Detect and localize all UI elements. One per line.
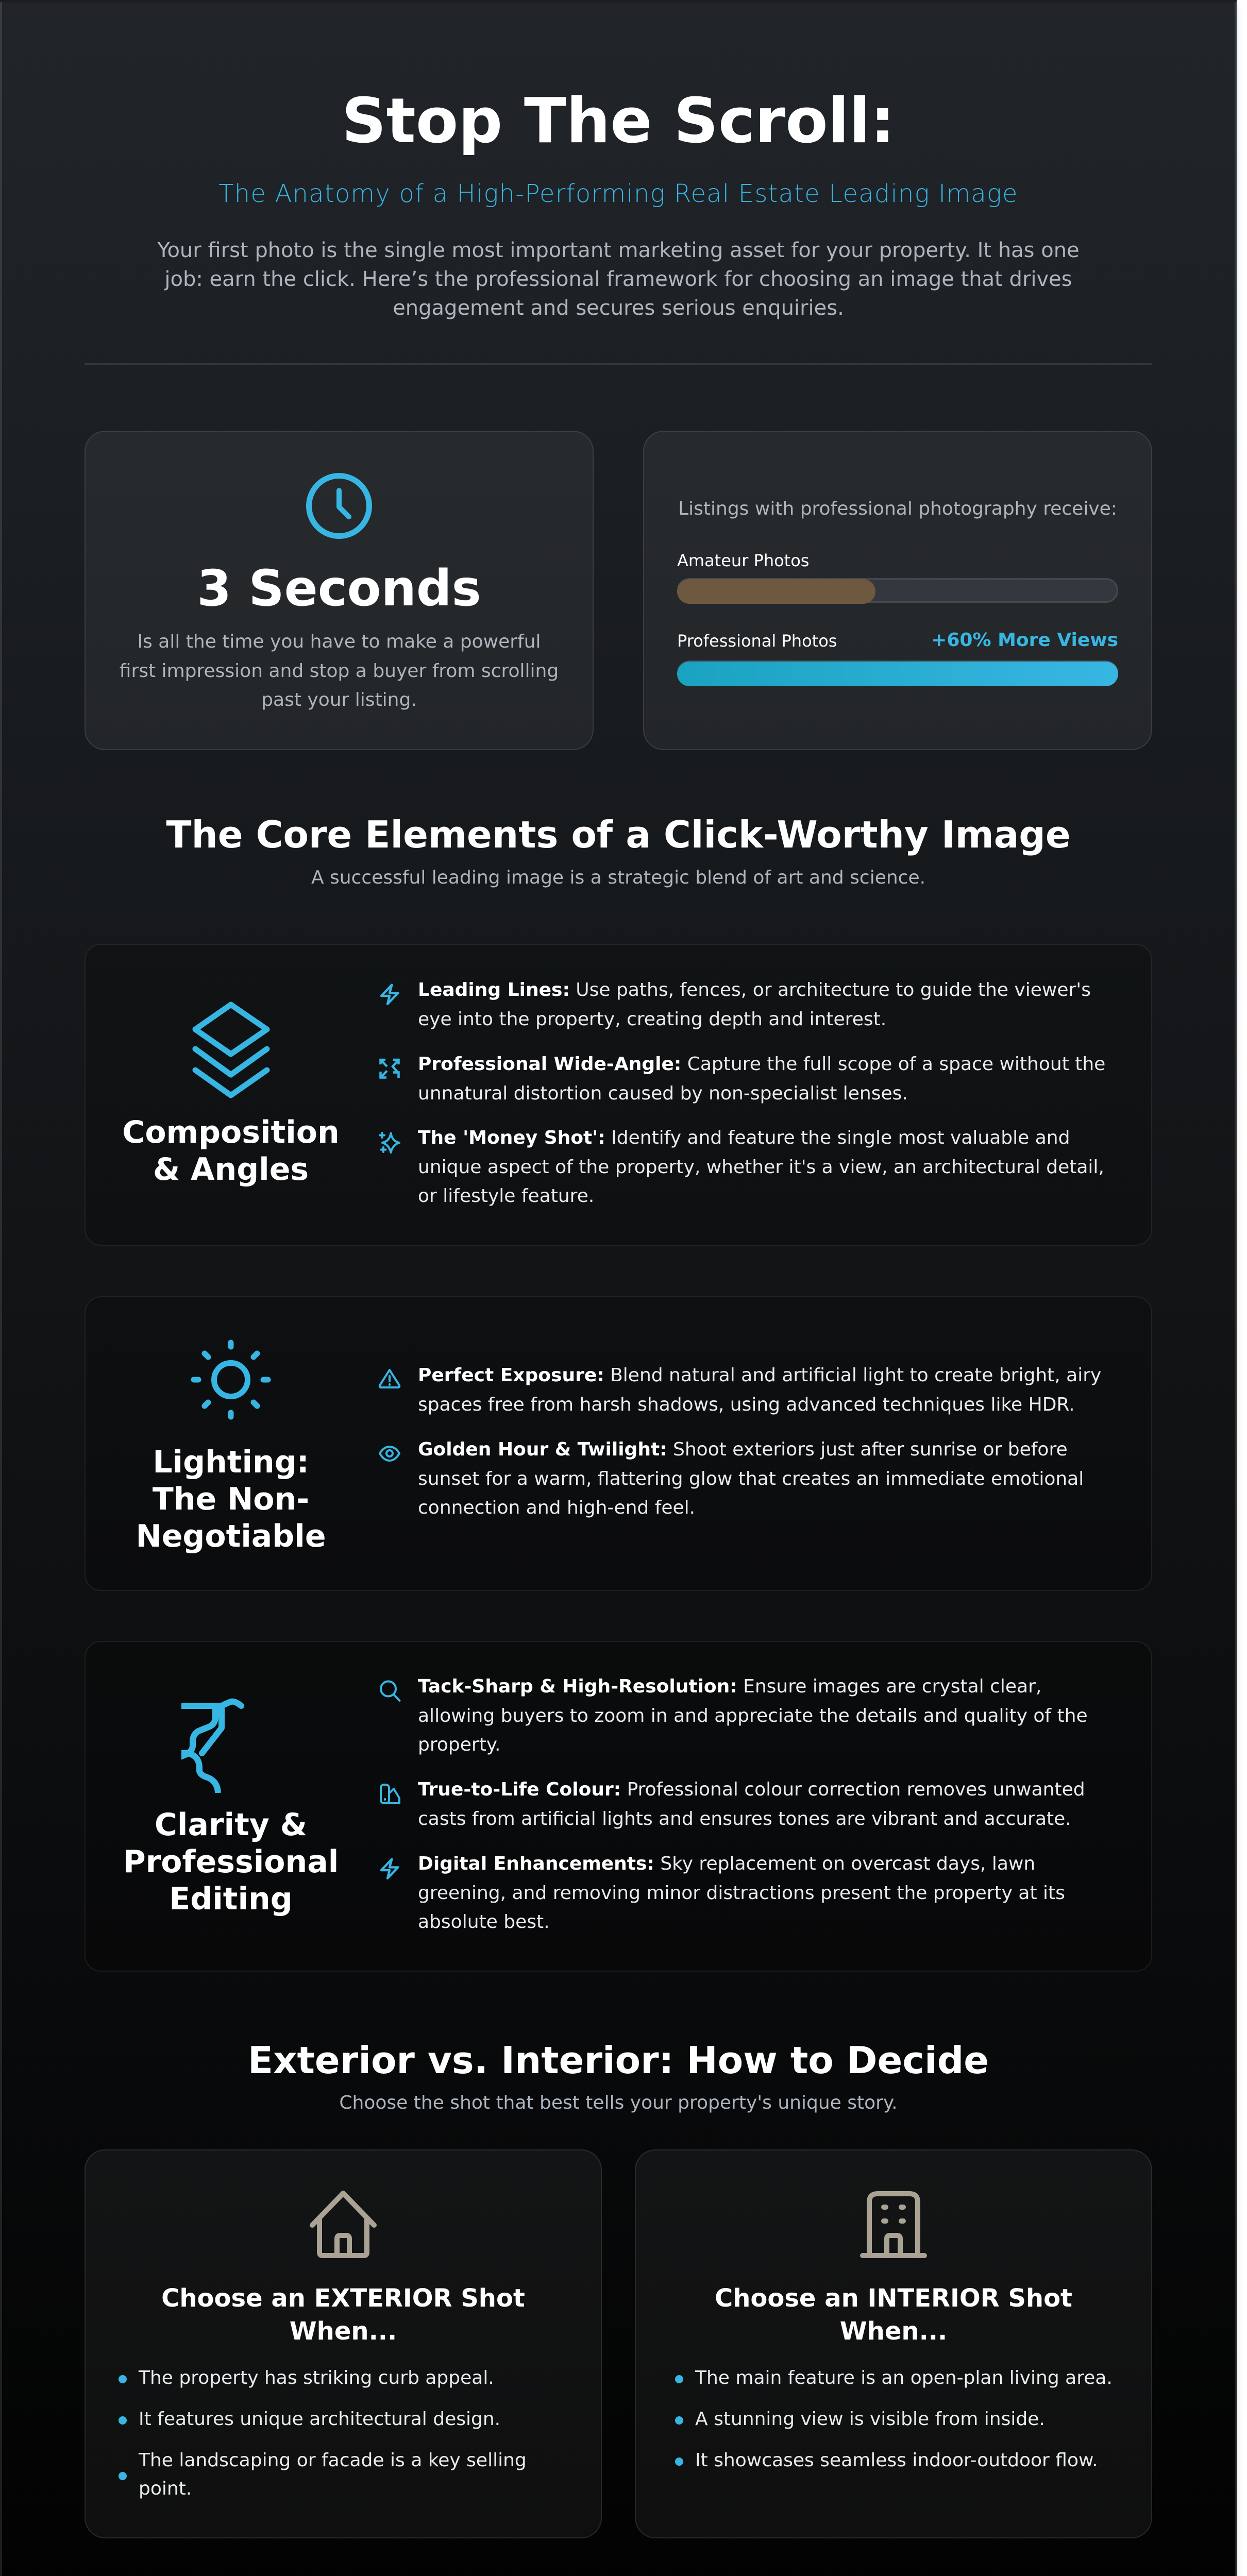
subheading: core elements: A successful leading image is a strategic blend of art and science. [311, 867, 925, 888]
bullet: It showcases seamless indoor-outdoor flow. [695, 2450, 1098, 2471]
bullet dot [119, 2416, 127, 2425]
list item: leading lines: eye into the property, creating depth and interest. [418, 1009, 886, 1029]
list item: perfect exposure: Perfect Exposure: Blend natural and artificial light to create bright, airy [418, 1365, 1101, 1386]
stat description: past your listing. [261, 689, 417, 710]
list item: money shot: unique aspect of the property, whether it's a view, an architectural detail, [418, 1156, 1104, 1178]
panel title: lighting: Negotiable [136, 1518, 326, 1554]
list item: digital enhancements: Digital Enhancements: Sky replacement on overcast days, lawn [418, 1853, 1035, 1874]
icon: magnifier [377, 1677, 402, 1703]
list item: leading lines [418, 979, 1091, 1029]
icon: bolt [380, 984, 399, 1005]
bullet dot [119, 2375, 127, 2383]
panel: interior [635, 2149, 1152, 2538]
panel title: clarity: Editing [169, 1881, 293, 1917]
panel: composition [85, 944, 1152, 1246]
list item: golden hour: sunset for a warm, flattering glow that creates an immediate emotional [418, 1468, 1084, 1489]
stat description [120, 631, 559, 710]
panel title: composition [122, 1114, 340, 1188]
list item: wide angle: Professional Wide-Angle: Capture the full scope of a space without the [418, 1054, 1105, 1075]
icon: expand [379, 1058, 400, 1079]
exterior heading: Choose an EXTERIOR Shot [161, 2284, 525, 2313]
panel title: composition: & Angles [153, 1151, 309, 1188]
list item: perfect exposure [418, 1365, 1101, 1415]
panel title: clarity: Clarity & [155, 1807, 307, 1843]
panel title: composition: Composition [122, 1114, 340, 1150]
panel: views comparison [643, 431, 1152, 750]
icon: colour swatch [377, 1781, 402, 1807]
title: Stop The Scroll: [342, 86, 895, 157]
bullet: A stunning view is visible from inside. [695, 2409, 1045, 2430]
bullet dot [675, 2375, 683, 2383]
subtitle: The Anatomy of a High-Performing Real Estate Leading Image [218, 179, 1018, 208]
panel: exterior [85, 2149, 602, 2538]
comparison heading: Listings with professional photography receive: [678, 498, 1117, 519]
subheading: exterior vs interior: Choose the shot that best tells your property's unique story. [339, 2092, 898, 2113]
panel title: lighting: Lighting: [153, 1444, 309, 1480]
bullet dot [675, 2458, 683, 2466]
list item: digital enhancements: greening, and removing minor distractions present the property at its [418, 1883, 1065, 1903]
list item: tack sharp [418, 1672, 1088, 1760]
list item: golden hour: Golden Hour & Twilight: Shoot exteriors just after sunrise or before [418, 1439, 1068, 1460]
list item: digital enhancements: absolute best. [418, 1911, 550, 1933]
panel title: lighting [136, 1444, 326, 1554]
heading: exterior vs interior: Exterior vs. Interior: How to Decide [248, 2039, 989, 2082]
list item: tack sharp: allowing buyers to zoom in and appreciate the details and quality of the [418, 1705, 1088, 1726]
bar label: amateur: Amateur Photos [677, 551, 809, 570]
panel title: clarity [85, 1806, 377, 1918]
panel: 3 seconds stat [85, 431, 594, 750]
stat number: 3 Seconds [197, 560, 481, 617]
bullet [139, 2446, 527, 2503]
panel title: clarity: Professional [123, 1844, 339, 1880]
list item: tack sharp: Tack-Sharp & High-Resolution: Ensure images are crystal clear, [418, 1676, 1041, 1697]
list item: golden hour [418, 1439, 1084, 1518]
list item: digital enhancements [418, 1850, 1065, 1937]
icon: money shot sparkle [379, 1132, 400, 1154]
intro text: engagement and secures serious enquiries. [393, 296, 844, 320]
panel: clarity [85, 1641, 1152, 1972]
list item: tack sharp: property. [418, 1734, 500, 1755]
panel title: lighting: The Non- [153, 1481, 309, 1517]
icon: building [857, 2189, 930, 2261]
heading: core elements: The Core Elements of a Click-Worthy Image [166, 813, 1071, 856]
list item: wide angle [418, 1054, 1105, 1104]
bar: professional [677, 660, 1118, 685]
list item: money shot: The 'Money Shot': Identify and feature the single most valuable and [418, 1127, 1070, 1148]
list item: perfect exposure: spaces free from harsh shadows, using advanced techniques like HDR. [418, 1394, 1075, 1415]
list item: true to life colour [418, 1775, 1085, 1834]
bullet: The main feature is an open-plan living area. [695, 2367, 1113, 2388]
intro text [157, 239, 1080, 320]
list item: leading lines: Leading Lines: Use paths, fences, or architecture to guide the viewer's [418, 979, 1091, 1001]
bar label: professional: Professional Photos [677, 631, 837, 651]
interior heading [635, 2282, 1152, 2348]
icon: editing brush [181, 1698, 246, 1793]
list item: money shot [418, 1127, 1104, 1207]
list item: golden hour: connection and high-end feel. [418, 1497, 695, 1518]
bullet: The property has striking curb appeal. [139, 2367, 494, 2388]
bullet dot [119, 2472, 127, 2480]
intro text: job: earn the click. Here’s the professional framework for choosing an image that drives [164, 267, 1072, 291]
interior heading: Choose an INTERIOR Shot [715, 2284, 1072, 2313]
icon: house [307, 2189, 379, 2261]
icon: warning triangle [378, 1368, 401, 1388]
bar: amateur [677, 578, 1118, 603]
intro text: Your first photo is the single most important marketing asset for your property. It has one [157, 239, 1080, 262]
list item: wide angle: unnatural distortion caused by non-specialist lenses. [418, 1083, 908, 1104]
bullet: The landscaping or facade is a key selling [139, 2450, 527, 2471]
exterior heading [85, 2282, 602, 2348]
icon: eye [379, 1446, 400, 1462]
interior heading: When... [840, 2317, 947, 2346]
exterior heading: When... [290, 2317, 397, 2346]
bullet: point. [139, 2478, 192, 2499]
icon: bolt [377, 1856, 402, 1881]
icon: clock [306, 473, 372, 539]
bullet: It features unique architectural design. [139, 2409, 500, 2430]
list item: true to life colour: casts from artificial lights and ensures tones are vibrant and accurate. [418, 1808, 1071, 1829]
icon: sun [191, 1340, 271, 1420]
stat description: first impression and stop a buyer from scrolling [120, 660, 559, 681]
callout: more views: +60% More Views [931, 630, 1118, 651]
list item: true to life colour: True-to-Life Colour: Professional colour correction removes unwanted [418, 1779, 1085, 1800]
list item: money shot: or lifestyle feature. [418, 1185, 594, 1207]
stat description: Is all the time you have to make a powerful [137, 631, 541, 652]
icon: layers [193, 1002, 270, 1098]
bullet dot [675, 2416, 683, 2425]
panel: lighting [85, 1296, 1152, 1591]
